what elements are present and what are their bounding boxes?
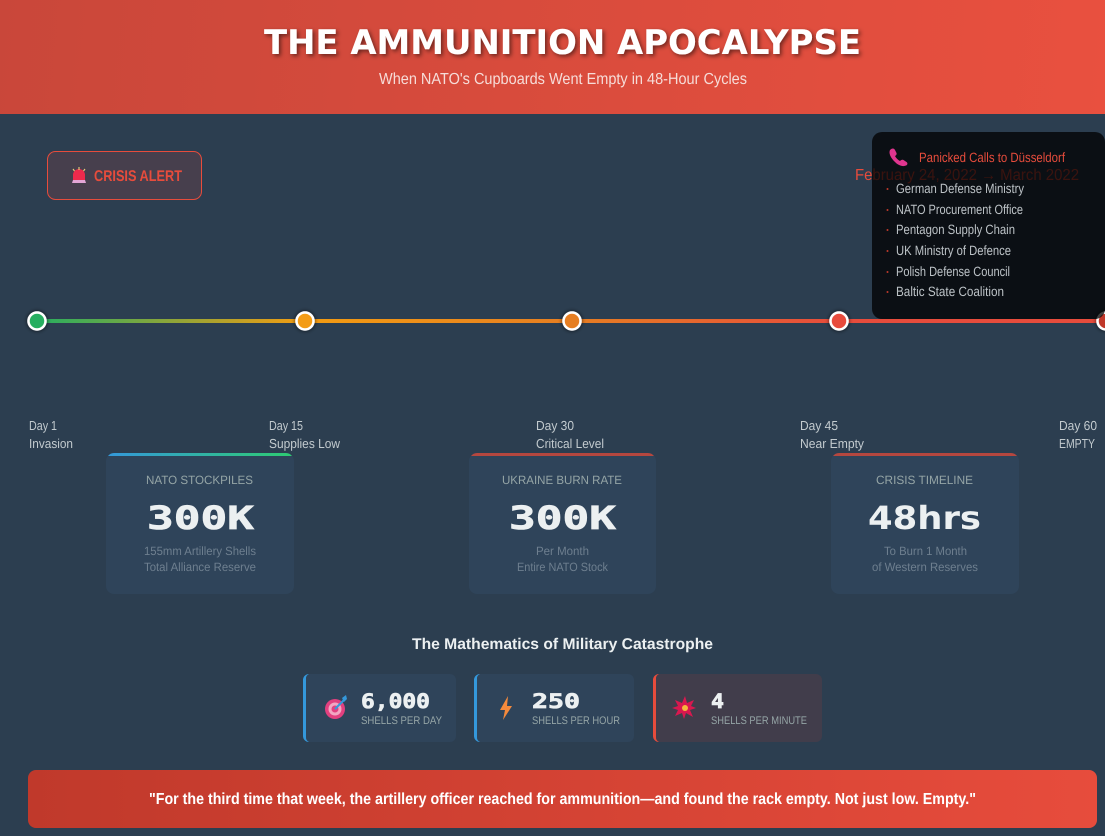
- timeline labels: Critical Level: [536, 436, 604, 451]
- stat: shells per day: [303, 674, 456, 742]
- quote text: "For the third time that week, the artillery officer reached for ammunition—and found the rack empty. Not just low. Empty.": [149, 791, 976, 808]
- card note: [144, 544, 256, 574]
- timeline labels: Day 30: [536, 418, 574, 433]
- panel: crisis timeline: [831, 453, 1019, 594]
- timeline labels: EMPTY: [1059, 436, 1095, 451]
- quote banner: [28, 770, 1097, 828]
- card note: To Burn 1 Month: [884, 544, 967, 558]
- date range: February 24, 2022 → March 2022: [855, 167, 1079, 184]
- contact list: UK Ministry of Defence: [896, 243, 1011, 258]
- timeline labels: Day 45: [800, 418, 838, 433]
- card note: 155mm Artillery Shells: [144, 544, 256, 558]
- icon: siren: [72, 167, 86, 183]
- card note: Entire NATO Stock: [517, 560, 609, 574]
- contact list: Polish Defense Council: [896, 264, 1010, 279]
- section heading: The Mathematics of Military Catastrophe: [412, 636, 713, 653]
- panel heading: Panicked Calls to Düsseldorf: [919, 150, 1065, 165]
- contact list: NATO Procurement Office: [896, 202, 1023, 217]
- timeline labels: Invasion: [29, 436, 73, 451]
- node: day 45: [830, 312, 848, 330]
- stat: shells per hour: [474, 674, 634, 742]
- card value: 300K: [147, 499, 255, 537]
- stat value: 250: [532, 689, 580, 713]
- card note: [872, 544, 978, 574]
- card label: UKRAINE BURN RATE: [502, 473, 622, 487]
- title: THE AMMUNITION APOCALYPSE: [264, 23, 861, 63]
- subtitle: When NATO's Cupboards Went Empty in 48-Hour Cycles: [379, 71, 747, 88]
- card value: 300K: [509, 499, 617, 537]
- panel: NATO stockpiles: [106, 453, 294, 594]
- panel: panicked calls: [872, 132, 1105, 319]
- card note: of Western Reserves: [872, 560, 978, 574]
- stat: shells per minute: [653, 674, 822, 742]
- panel: Ukraine burn rate: [469, 453, 656, 594]
- contact list: Pentagon Supply Chain: [896, 222, 1015, 237]
- timeline labels: Near Empty: [800, 436, 864, 451]
- card note: [517, 544, 609, 574]
- node: day 30: [564, 312, 580, 330]
- timeline labels: Supplies Low: [269, 436, 341, 451]
- timeline labels: Day 15: [269, 418, 303, 433]
- icon: lightning: [500, 696, 512, 720]
- timeline labels: [29, 418, 1097, 451]
- icon: target: [325, 695, 347, 719]
- timeline: [28, 312, 1105, 330]
- timeline labels: Day 60: [1059, 418, 1097, 433]
- alert label: CRISIS ALERT: [94, 168, 182, 185]
- node: day 1: [28, 312, 46, 330]
- card note: Total Alliance Reserve: [144, 560, 256, 574]
- contact list: [886, 181, 1024, 299]
- card label: NATO STOCKPILES: [146, 473, 253, 487]
- stat label: SHELLS PER DAY: [361, 715, 443, 727]
- card note: Per Month: [536, 544, 589, 558]
- contact list: Baltic State Coalition: [896, 284, 1004, 299]
- stat value: 4: [711, 689, 724, 713]
- stat value: 6,000: [361, 689, 430, 713]
- node: day 15: [296, 312, 314, 330]
- stat label: SHELLS PER HOUR: [532, 715, 620, 727]
- icon: explosion: [672, 696, 696, 719]
- stat label: SHELLS PER MINUTE: [711, 715, 807, 727]
- icon: telephone: [890, 148, 907, 166]
- header band: [0, 0, 1105, 114]
- contact list: German Defense Ministry: [896, 181, 1024, 196]
- crisis alert badge: [48, 152, 202, 200]
- timeline labels: Day 1: [29, 418, 57, 433]
- card label: CRISIS TIMELINE: [876, 473, 973, 487]
- node: day 60: [1098, 312, 1105, 330]
- card value: 48hrs: [868, 499, 981, 537]
